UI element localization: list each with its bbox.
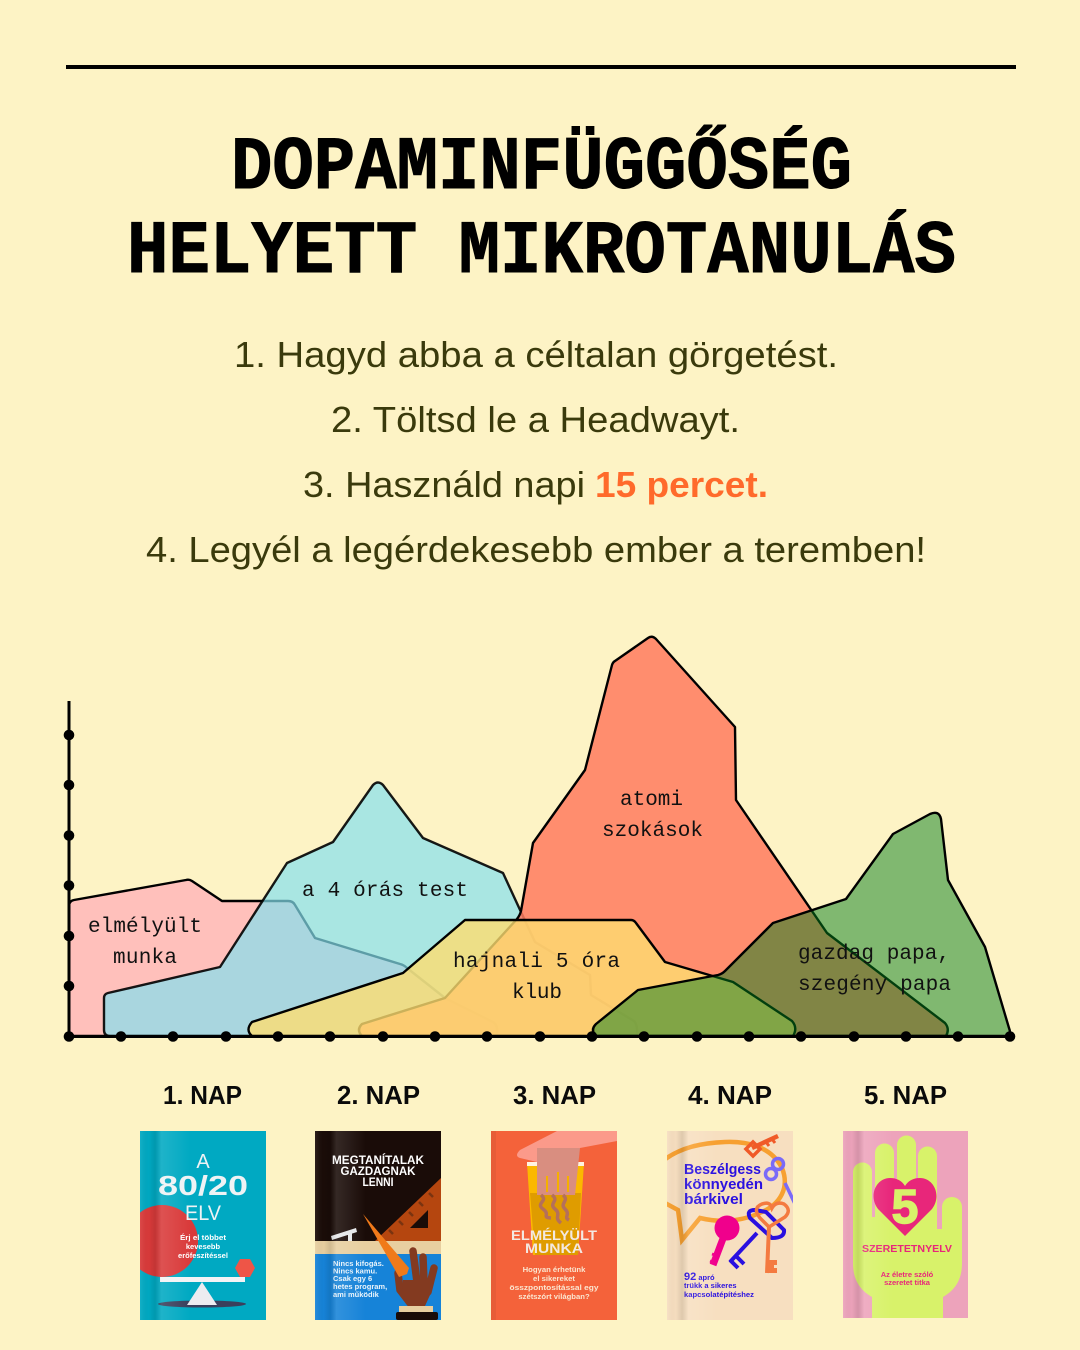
book: Megtanítalak gazdagnak lenni: ami működik xyxy=(333,1290,380,1299)
book: A 80/20 elv: A xyxy=(196,1151,210,1173)
chart labels: atomi xyxy=(620,789,683,812)
book: Beszélgess könnyedén bárkivel: könnyedén xyxy=(684,1177,763,1193)
steps text block: 4. Legyél a legérdekesebb ember a teremben! xyxy=(146,529,926,570)
book: Elmélyült munka xyxy=(491,1131,617,1320)
book: Elmélyült munka: el sikereket xyxy=(533,1274,575,1283)
book: A 80/20 elv: kevesebb xyxy=(186,1242,221,1251)
area: hajnali 5 óra klub xyxy=(248,920,795,1036)
steps text block: 15 percet. xyxy=(595,464,768,505)
book: 5 szeretetnyelv: SZERETETNYELV xyxy=(862,1243,952,1255)
area: atomi szokások xyxy=(359,637,948,1036)
chart labels: klub xyxy=(512,982,562,1005)
book: A 80/20 elv: erőfeszítéssel xyxy=(178,1251,228,1260)
book: Beszélgess könnyedén bárkivel: trükk a sikeres xyxy=(684,1281,737,1290)
book: Megtanítalak gazdagnak lenni xyxy=(315,1131,441,1320)
book: Beszélgess könnyedén bárkivel: bárkivel xyxy=(684,1192,743,1208)
book: Beszélgess könnyedén bárkivel: kapcsolatépítéshez xyxy=(684,1290,754,1299)
book: A 80/20 elv: 80/20 xyxy=(158,1170,248,1201)
steps text block: 2. Töltsd le a Headwayt. xyxy=(331,399,740,440)
day labels: 3. NAP xyxy=(513,1080,596,1110)
chart labels: gazdag papa, xyxy=(798,943,950,966)
book: A 80/20 elv: ELV xyxy=(185,1202,221,1225)
chart labels: elmélyült xyxy=(88,916,202,939)
book: Megtanítalak gazdagnak lenni: hetes program, xyxy=(333,1282,387,1291)
chart labels xyxy=(88,789,951,1005)
area chart xyxy=(64,637,1015,1042)
steps text block: 3. Használd napi xyxy=(303,464,585,505)
book: Megtanítalak gazdagnak lenni: Csak egy 6 xyxy=(333,1274,372,1283)
day labels: 2. NAP xyxy=(337,1080,420,1110)
book: Megtanítalak gazdagnak lenni: Nincs kifogás. xyxy=(333,1259,384,1268)
book: 5 szeretetnyelv: szeretet titka xyxy=(884,1278,931,1287)
day labels: 1. NAP xyxy=(163,1080,242,1110)
title: DOPAMINFÜGGŐSÉG xyxy=(231,125,852,211)
book: Elmélyült munka: Hogyan érhetünk xyxy=(523,1265,586,1274)
book: Beszélgess könnyedén bárkivel xyxy=(664,1131,796,1320)
chart axes xyxy=(64,701,1015,1042)
area: elmélyült munka xyxy=(69,880,497,1036)
chart labels: szegény papa xyxy=(798,974,951,997)
book: Beszélgess könnyedén bárkivel: Beszélgess xyxy=(684,1162,761,1178)
book: Megtanítalak gazdagnak lenni: Nincs kamu. xyxy=(333,1266,377,1276)
area: gazdag papa, szegény papa xyxy=(593,813,1010,1036)
chart labels: a 4 órás test xyxy=(302,880,468,903)
book: Elmélyült munka: ELMÉLYÜLT xyxy=(511,1228,598,1243)
book: Elmélyült munka: MUNKA xyxy=(525,1241,583,1256)
chart labels: munka xyxy=(113,947,177,970)
book: A 80/20 elv xyxy=(126,1131,266,1320)
title xyxy=(127,125,956,295)
book: Megtanítalak gazdagnak lenni: LENNI xyxy=(362,1177,394,1189)
book: Megtanítalak gazdagnak lenni: MEGTANÍTALAK xyxy=(332,1154,425,1167)
title: HELYETT MIKROTANULÁS xyxy=(127,210,956,295)
area: a 4 órás test xyxy=(104,782,637,1036)
book: Megtanítalak gazdagnak lenni: GAZDAGNAK xyxy=(340,1166,416,1178)
book: Beszélgess könnyedén bárkivel: 92 apró xyxy=(684,1271,715,1283)
day labels xyxy=(163,1080,947,1110)
steps text block: 1. Hagyd abba a céltalan görgetést. xyxy=(234,334,838,375)
steps text block xyxy=(146,334,926,570)
chart labels: hajnali 5 óra xyxy=(453,951,620,974)
day labels: 5. NAP xyxy=(864,1080,947,1110)
book: 5 szeretetnyelv: Az életre szóló xyxy=(881,1270,934,1279)
book: Elmélyült munka: szétszórt világban? xyxy=(518,1292,590,1301)
chart labels: szokások xyxy=(602,820,703,843)
book: 5 szeretetnyelv xyxy=(843,1131,968,1318)
book: Elmélyült munka: összpontosítással egy xyxy=(510,1283,599,1292)
book: 5 szeretetnyelv: 5 xyxy=(892,1181,918,1234)
day labels: 4. NAP xyxy=(688,1080,772,1110)
book: A 80/20 elv: Érj el többet xyxy=(180,1233,227,1242)
